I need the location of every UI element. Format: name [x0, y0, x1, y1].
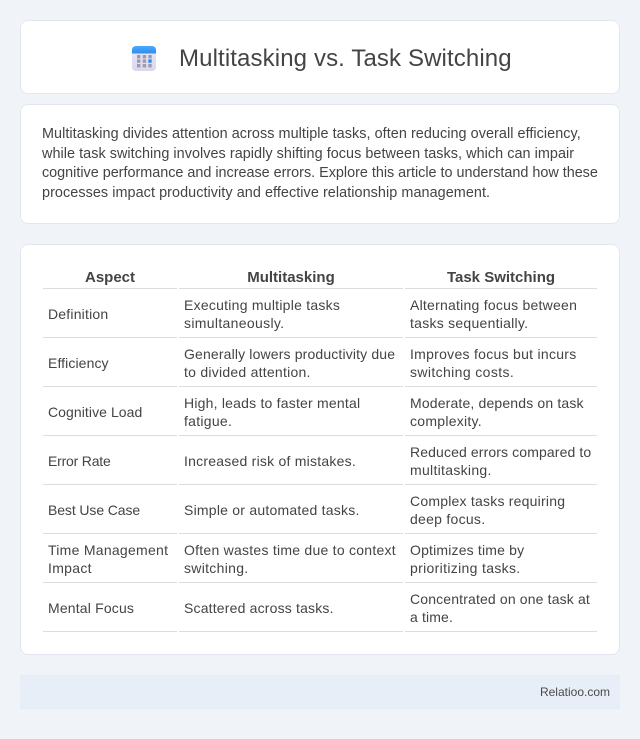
- row: best use case: Best Use Case: [48, 502, 140, 518]
- row: efficiency: Efficiency: [48, 355, 109, 371]
- row: mental focus: [48, 591, 590, 625]
- row: efficiency: Generally lowers productivity due: [184, 346, 395, 362]
- row: cognitive load: High, leads to faster mental: [184, 395, 360, 411]
- row: error rate: [48, 444, 591, 478]
- row: best use case: [48, 493, 565, 527]
- row: best use case: Complex tasks requiring: [410, 493, 565, 509]
- row: efficiency: Improves focus but incurs: [410, 346, 577, 362]
- row: mental focus: Mental Focus: [48, 600, 134, 616]
- table panel: [20, 244, 620, 655]
- footer: [20, 675, 620, 709]
- intro text: cognitive performance and increase errors. Explore this article to understand how these: [42, 165, 598, 181]
- row: cognitive load: complexity.: [410, 413, 482, 429]
- intro text: processes impact productivity and effective relationship management.: [42, 185, 490, 201]
- row: time management impact: prioritizing tasks.: [410, 560, 521, 576]
- row: mental focus: a time.: [410, 609, 453, 625]
- title: Multitasking vs. Task Switching: [179, 45, 512, 72]
- row: error rate: Error Rate: [48, 453, 111, 469]
- row: time management impact: [48, 542, 524, 576]
- row: time management impact: Impact: [48, 560, 92, 576]
- row: definition: tasks sequentially.: [410, 315, 528, 331]
- row: error rate: multitasking.: [410, 462, 492, 478]
- row: time management impact: Time Management: [48, 542, 168, 558]
- row: cognitive load: Cognitive Load: [48, 404, 142, 420]
- intro text: [42, 126, 598, 201]
- row: definition: Definition: [48, 306, 108, 322]
- row: time management impact: Often wastes time due to context: [184, 542, 396, 558]
- row: cognitive load: [48, 395, 584, 429]
- row: best use case: deep focus.: [410, 511, 485, 527]
- row: mental focus: Concentrated on one task at: [410, 591, 590, 607]
- header card: [20, 20, 620, 94]
- column headings: Multitasking: [247, 269, 335, 286]
- column headings: [85, 269, 555, 286]
- row: efficiency: to divided attention.: [184, 364, 311, 380]
- row: time management impact: switching.: [184, 560, 248, 576]
- icon: calendar: [132, 46, 156, 71]
- intro panel: [20, 104, 620, 224]
- row: time management impact: Optimizes time by: [410, 542, 524, 558]
- row: mental focus: Scattered across tasks.: [184, 600, 334, 616]
- row: definition: [48, 297, 577, 331]
- row: definition: Executing multiple tasks: [184, 297, 340, 313]
- footer credit: Relatioo.com: [540, 685, 610, 699]
- column headings: Task Switching: [447, 269, 555, 286]
- row: best use case: Simple or automated tasks.: [184, 502, 360, 518]
- intro text: Multitasking divides attention across multiple tasks, often reducing overall efficiency,: [42, 126, 581, 142]
- row: efficiency: switching costs.: [410, 364, 514, 380]
- intro text: while task switching involves rapidly shifting focus between tasks, which can impair: [42, 146, 574, 162]
- row: error rate: Reduced errors compared to: [410, 444, 591, 460]
- row: error rate: Increased risk of mistakes.: [184, 453, 356, 469]
- row: definition: simultaneously.: [184, 315, 284, 331]
- column headings: Aspect: [85, 269, 135, 286]
- row: cognitive load: Moderate, depends on task: [410, 395, 584, 411]
- row: definition: Alternating focus between: [410, 297, 577, 313]
- row: efficiency: [48, 346, 577, 380]
- row: cognitive load: fatigue.: [184, 413, 232, 429]
